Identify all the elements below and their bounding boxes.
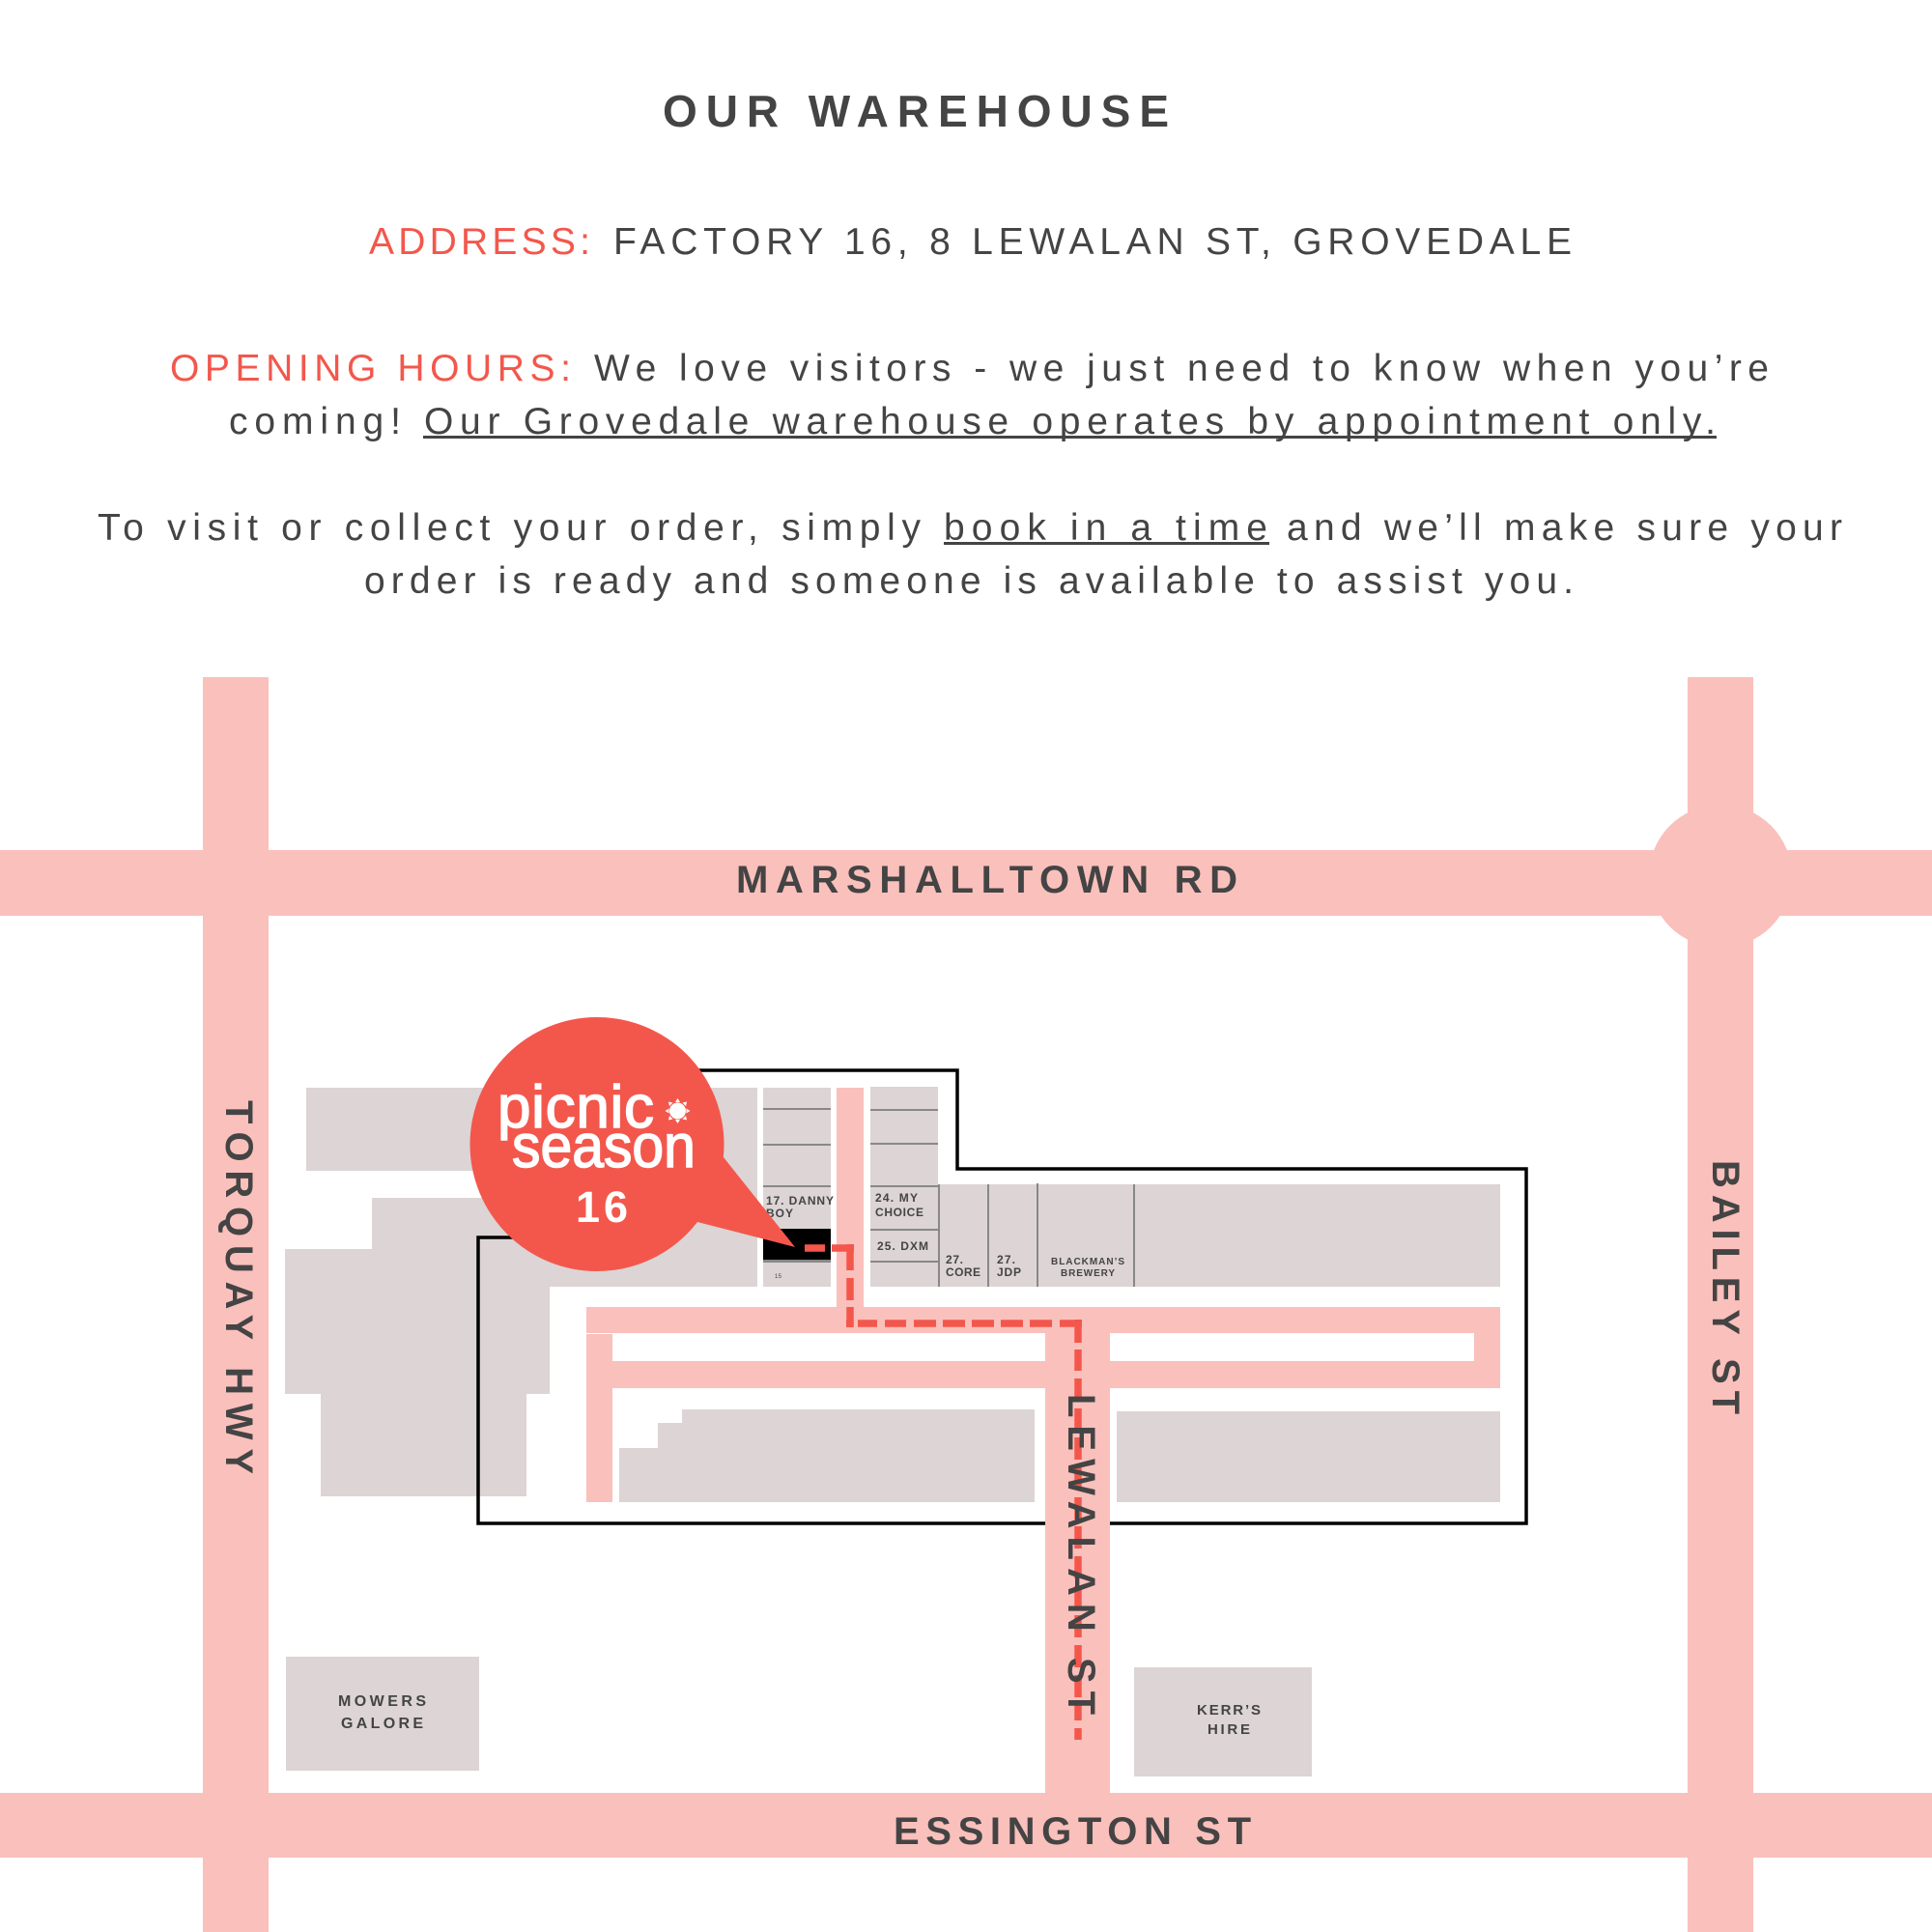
- road: Essington St: [0, 1793, 1932, 1858]
- building: Mowers Galore: [286, 1657, 479, 1771]
- label: Mowers Galore: GALORE: [341, 1716, 423, 1732]
- unit labels: 25. DXM: [877, 1239, 928, 1253]
- label: Mowers Galore: MOWERS: [338, 1693, 426, 1710]
- road: Bailey St: [1688, 677, 1753, 1932]
- unit dividers: [763, 1108, 1135, 1287]
- callout: picnic season 16 pin: [469, 1017, 795, 1271]
- unit labels: 27.: [946, 1253, 963, 1266]
- booking text block: [98, 507, 1842, 602]
- building: upper left block: [306, 1088, 757, 1171]
- opening hours text block: We love visitors - we just need to know when you’re: [594, 348, 1769, 389]
- building: large left block: [285, 1198, 757, 1496]
- address text block: ADDRESS:: [369, 221, 590, 263]
- map: [0, 677, 1932, 1932]
- unit labels: BOY: [766, 1207, 793, 1220]
- building: lower right block: [1117, 1411, 1500, 1502]
- internal roads: [586, 1088, 1500, 1794]
- unit labels: [766, 1191, 1124, 1280]
- logo word: season: season: [512, 1112, 696, 1179]
- unit labels: 15: [775, 1274, 782, 1280]
- unit labels: CHOICE: [875, 1206, 923, 1219]
- title: OUR WAREHOUSE: [663, 86, 1169, 136]
- opening hours text block: coming!: [229, 401, 401, 442]
- unit labels: BLACKMAN’S: [1051, 1257, 1124, 1267]
- label: Torquay Hwy: TORQUAY HWY: [217, 1100, 260, 1474]
- label: Bailey St: BAILEY ST: [1704, 1160, 1747, 1414]
- opening hours text block: Our Grovedale warehouse operates by appointment only.: [424, 401, 1716, 442]
- icon: sun: [665, 1098, 690, 1123]
- building: column with units 15-17: [763, 1088, 831, 1287]
- unit labels: JDP: [997, 1265, 1021, 1279]
- building: column with units 24-25: [870, 1087, 938, 1287]
- address text block: FACTORY 16, 8 LEWALAN ST, GROVEDALE: [613, 221, 1572, 263]
- label: Kerr's Hire: KERR’S: [1197, 1702, 1261, 1719]
- unit labels: 17. DANNY: [766, 1194, 834, 1208]
- label: Marshalltown Rd: MARSHALLTOWN RD: [736, 859, 1237, 901]
- building: connector block: [580, 1171, 757, 1198]
- unit number 16: 16: [576, 1182, 628, 1232]
- estate boundary outline: [478, 1070, 1526, 1523]
- building: Kerr's Hire: [1134, 1667, 1312, 1776]
- opening hours text block: [170, 348, 1769, 442]
- logo word: picnic: picnic: [497, 1074, 654, 1141]
- unit labels: CORE: [946, 1265, 980, 1279]
- unit labels: 24. MY: [875, 1191, 918, 1205]
- roundabout: [1649, 805, 1792, 948]
- road: Torquay Hwy: [203, 677, 269, 1932]
- building: right long block: [939, 1184, 1500, 1287]
- warehouse unit 16 highlighted: [763, 1229, 831, 1260]
- unit labels: BREWERY: [1061, 1268, 1115, 1279]
- unit labels: 27.: [997, 1253, 1015, 1266]
- label: Kerr's Hire: [1197, 1702, 1261, 1738]
- booking text block: To visit or collect your order, simply: [98, 507, 922, 549]
- booking text block: order is ready and someone is available to assist you.: [364, 560, 1574, 602]
- road: Marshalltown Rd: [0, 850, 1932, 916]
- label: Mowers Galore: [338, 1693, 426, 1732]
- booking text block: and we’ll make sure your: [1287, 507, 1842, 549]
- booking text block: book in a time: [944, 507, 1267, 549]
- building: lower middle block: [619, 1409, 1035, 1502]
- label: Lewalan St: LEWALAN ST: [1060, 1394, 1102, 1715]
- label: Essington St: ESSINGTON ST: [894, 1810, 1251, 1853]
- dashed route: [805, 1244, 1082, 1740]
- opening hours text block: OPENING HOURS:: [170, 348, 571, 389]
- label: Kerr's Hire: HIRE: [1208, 1721, 1250, 1738]
